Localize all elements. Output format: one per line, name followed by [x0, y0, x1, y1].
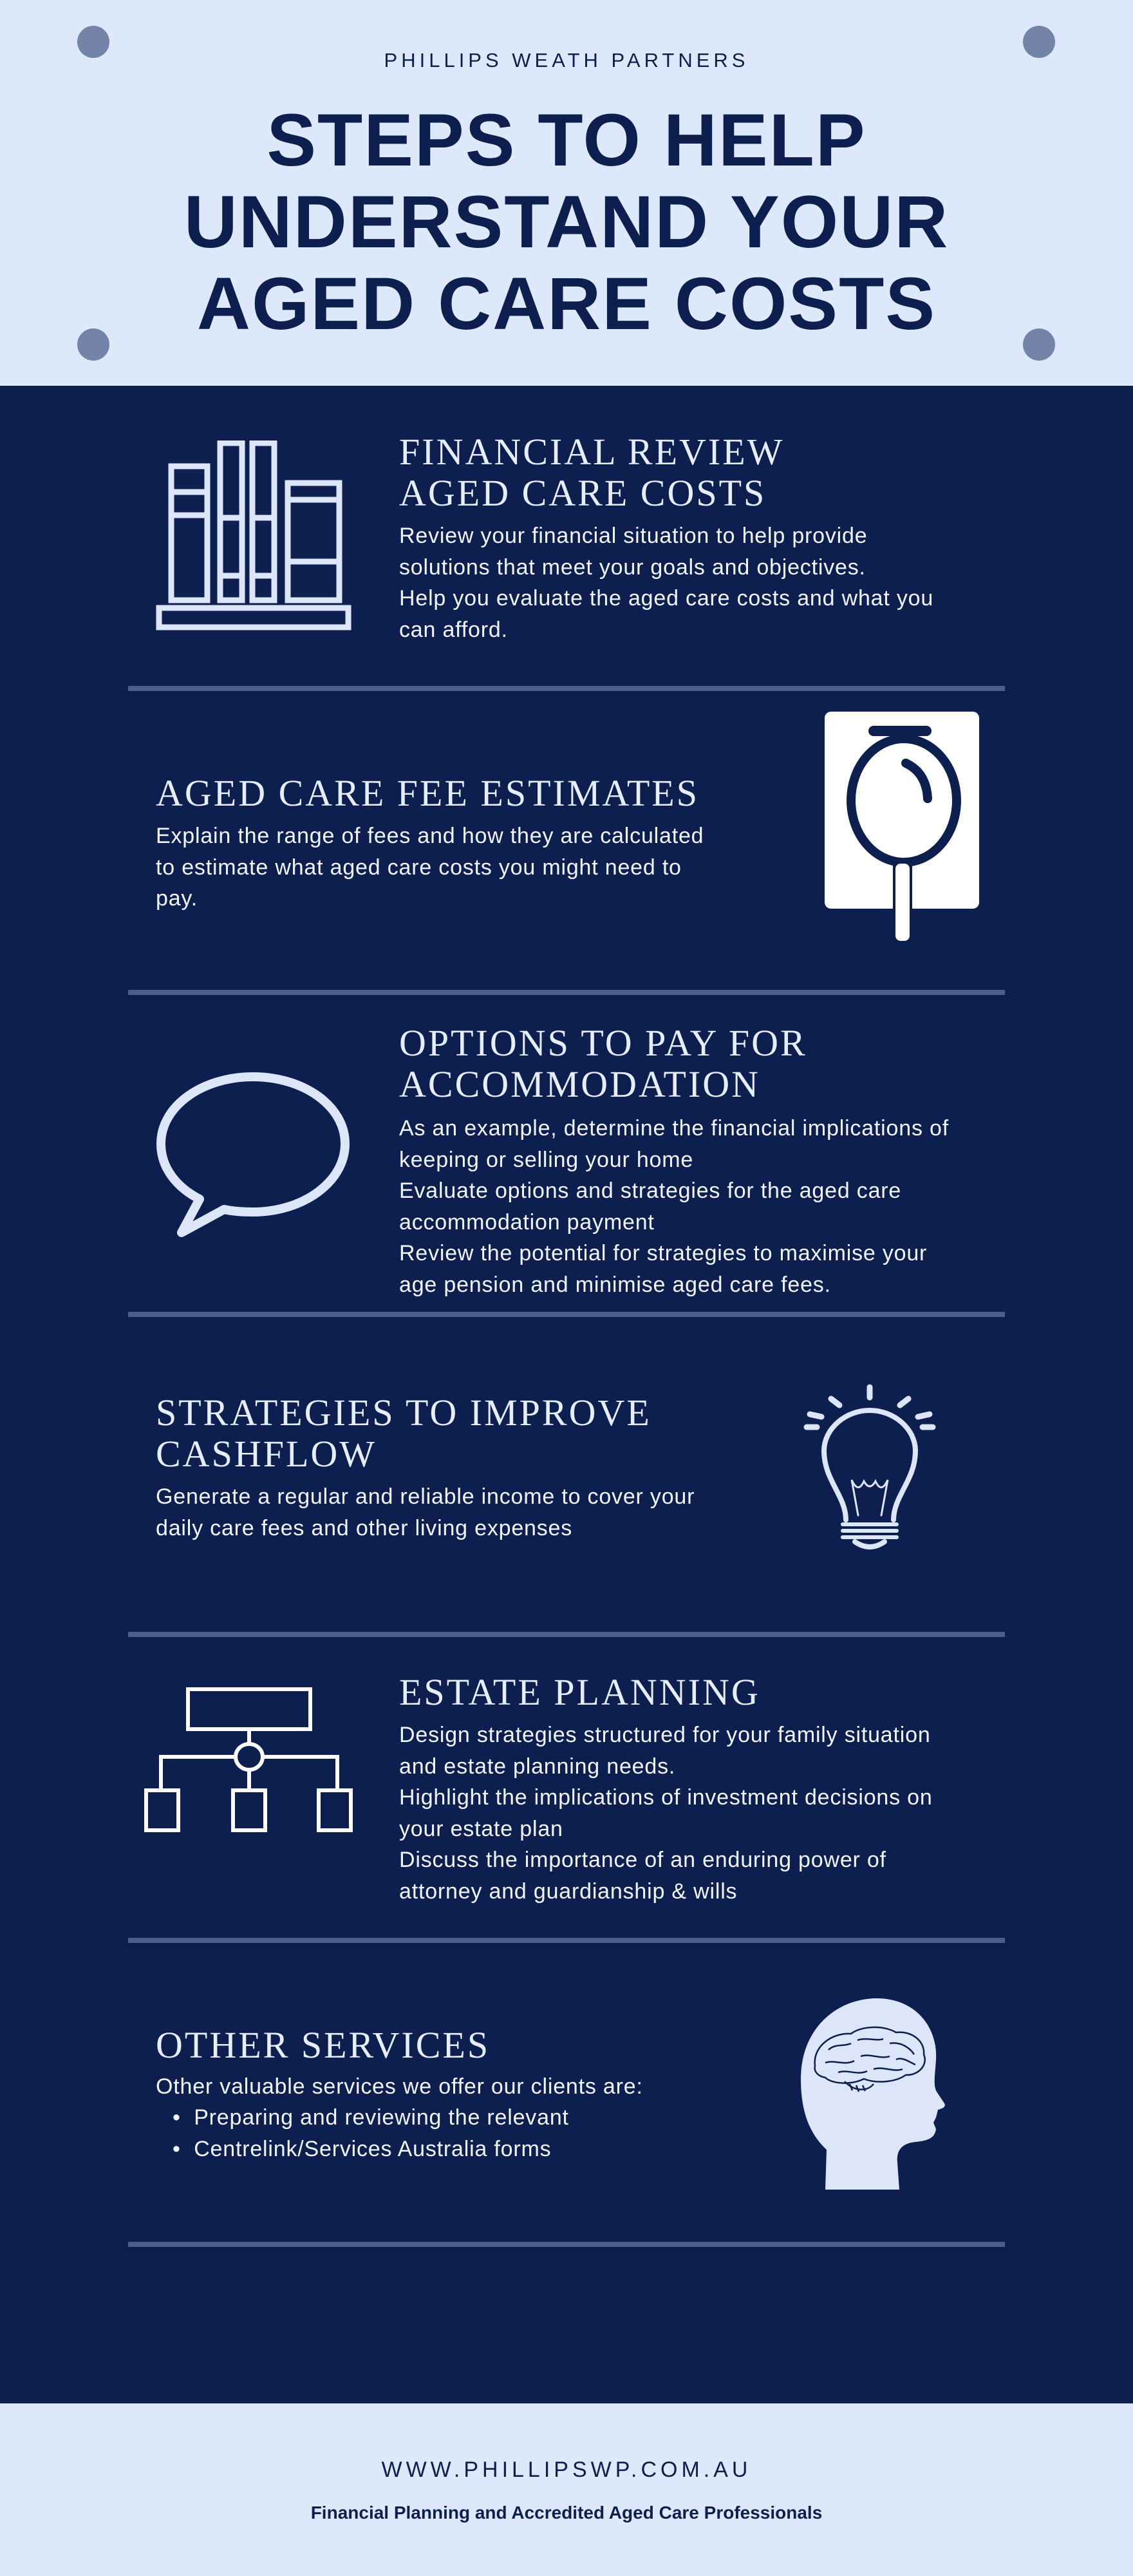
body text: to estimate what aged care costs you might need to: [156, 855, 682, 880]
body text: and estate planning needs.: [399, 1754, 675, 1779]
heading: [156, 1392, 651, 1475]
section: estate planning: [144, 1671, 933, 1904]
heading: AGED CARE FEE ESTIMATES: [156, 772, 699, 814]
section: financial review: [156, 431, 933, 641]
tagline: Financial Planning and Accredited Aged Care Professionals: [311, 2503, 822, 2523]
body text: can afford.: [399, 617, 508, 641]
body text: [156, 824, 704, 911]
heading: AGED CARE COSTS: [399, 472, 766, 514]
body text: pay.: [156, 886, 198, 911]
body text: Highlight the implications of investment decisions on: [399, 1785, 933, 1810]
body text: Help you evaluate the aged care costs and what you: [399, 586, 933, 611]
icon: clipboard magnifier: [825, 712, 979, 941]
body text: Review your financial situation to help provide: [399, 524, 867, 548]
body text: As an example, determine the financial implications of: [399, 1116, 949, 1141]
dot bottom-right: [1023, 328, 1055, 361]
section: fee estimates: [156, 712, 979, 941]
bullet list: [173, 2105, 569, 2161]
heading: [399, 431, 784, 514]
bullet list: • Preparing and reviewing the relevant: [173, 2105, 569, 2130]
icon: speech bubble: [156, 1072, 350, 1237]
heading: ACCOMMODATION: [399, 1063, 760, 1105]
heading: FINANCIAL REVIEW: [399, 431, 784, 473]
body text: solutions that meet your goals and objectives.: [399, 555, 866, 580]
icon: light bulb: [803, 1385, 936, 1549]
website url: WWW.PHILLIPSWP.COM.AU: [381, 2458, 751, 2482]
body text: Discuss the importance of an enduring power of: [399, 1848, 886, 1872]
body text: Generate a regular and reliable income to cover your: [156, 1484, 695, 1509]
heading: OPTIONS TO PAY FOR: [399, 1022, 807, 1064]
body text: Explain the range of fees and how they are calculated: [156, 824, 704, 848]
dot bottom-left: [77, 328, 109, 361]
dot top-left: [77, 26, 109, 58]
company name: PHILLIPS WEATH PARTNERS: [384, 49, 749, 71]
body text: keeping or selling your home: [399, 1148, 693, 1172]
body text: age pension and minimise aged care fees.: [399, 1273, 831, 1297]
body text: attorney and guardianship & wills: [399, 1879, 737, 1904]
heading: ESTATE PLANNING: [399, 1671, 760, 1713]
footer panel: [0, 2403, 1133, 2576]
body text: accommodation payment: [399, 1209, 655, 1234]
title: [184, 99, 949, 345]
title: STEPS TO HELP: [267, 99, 866, 182]
body text: [399, 524, 933, 641]
body text: Evaluate options and strategies for the aged care: [399, 1179, 901, 1203]
icon: books: [156, 440, 351, 630]
section: accommodation: [156, 1022, 949, 1297]
section: cashflow: [156, 1385, 936, 1549]
dot top-right: [1023, 26, 1055, 58]
body text: Review the potential for strategies to maximise your: [399, 1241, 927, 1265]
section: other services: [156, 1998, 945, 2190]
body text: [399, 1723, 933, 1904]
body text: your estate plan: [399, 1816, 563, 1841]
body text: Other valuable services we offer our clients are:: [156, 2074, 643, 2099]
header panel: [0, 0, 1133, 386]
title: UNDERSTAND YOUR: [184, 181, 949, 263]
body text: [399, 1116, 949, 1297]
title: AGED CARE COSTS: [197, 263, 936, 345]
heading: OTHER SERVICES: [156, 2024, 490, 2066]
bullet list: • Centrelink/Services Australia forms: [173, 2137, 551, 2161]
heading: [399, 1022, 807, 1105]
body text: [156, 1484, 695, 1540]
body text: daily care fees and other living expenses: [156, 1516, 572, 1540]
heading: CASHFLOW: [156, 1433, 377, 1475]
heading: STRATEGIES TO IMPROVE: [156, 1392, 651, 1434]
body text: Design strategies structured for your family situation: [399, 1723, 931, 1747]
icon: hierarchy tree: [144, 1687, 353, 1832]
icon: head with brain: [801, 1998, 945, 2190]
